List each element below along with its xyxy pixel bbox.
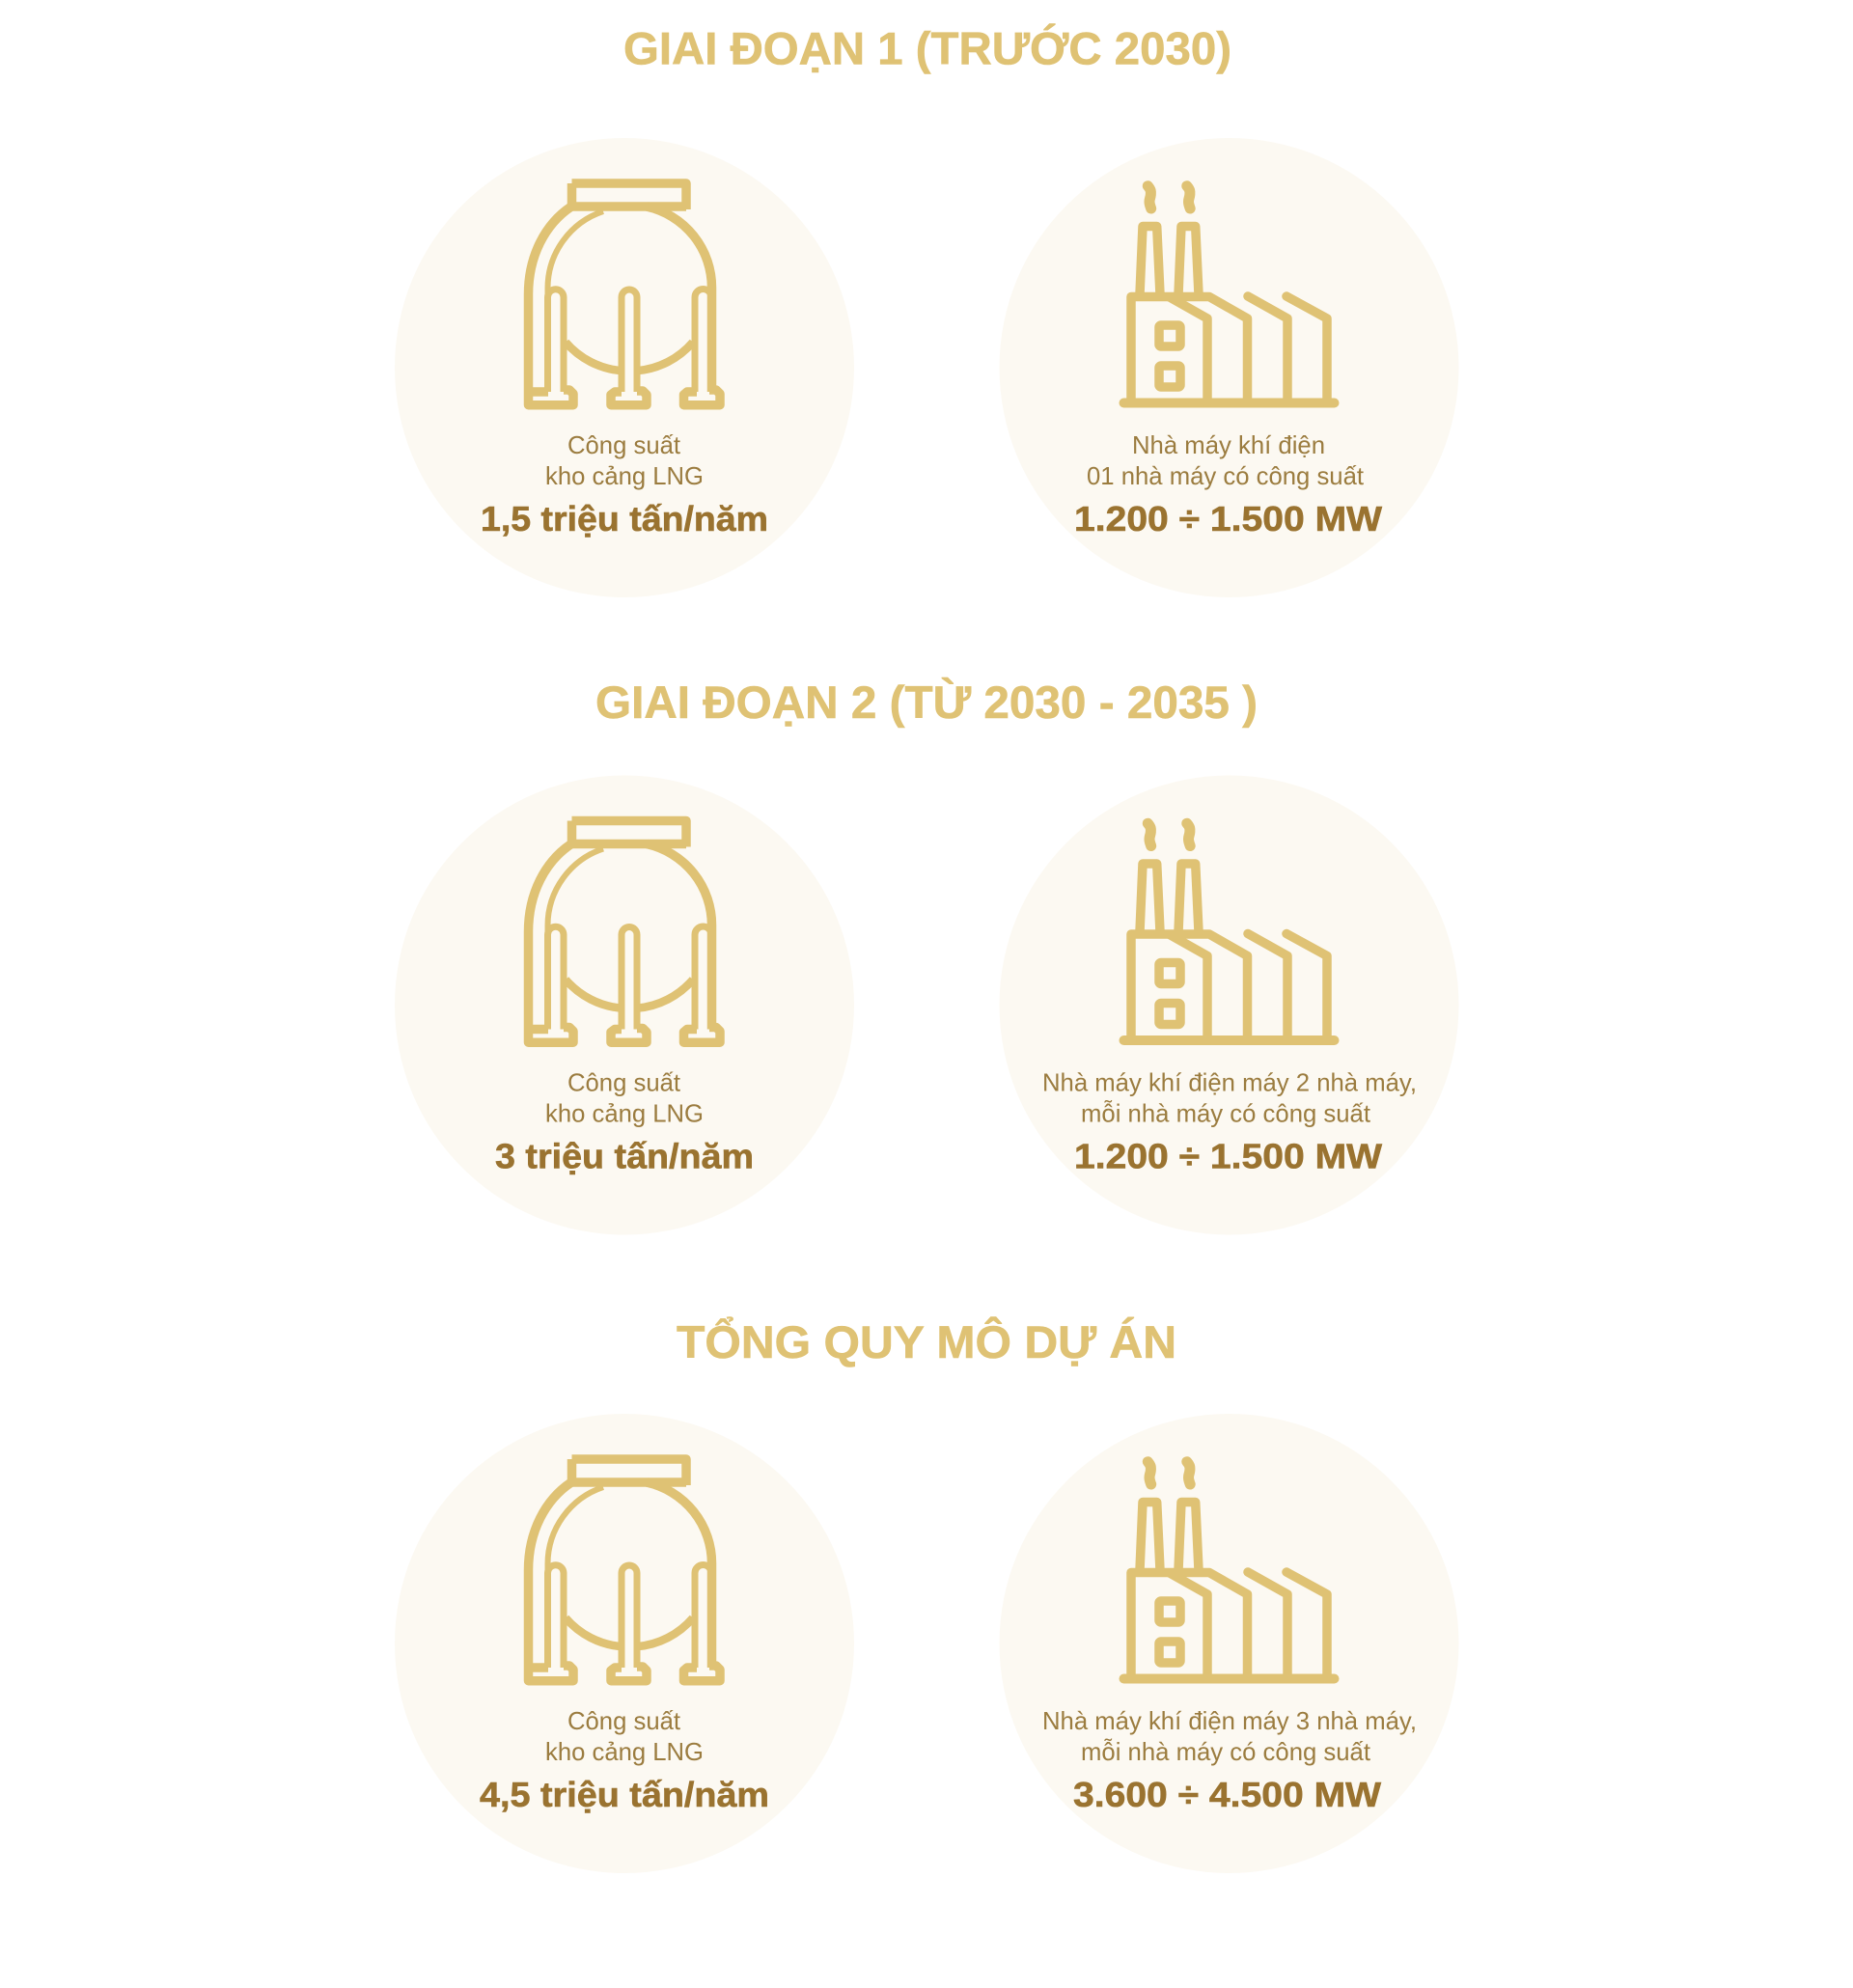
text: nhà máy khí điện máy 2 nhà máy: Nhà máy khí điện máy 2 nhà máy, — [1042, 1067, 1417, 1096]
text: công suất: Công suất — [567, 1706, 681, 1735]
value: 3.600 ÷ 4.500 MW: 3.600 ÷ 4.500 MW — [1073, 1775, 1381, 1814]
panel: tổng nhà máy khí điện — [1000, 1414, 1459, 1873]
icon: LNG tank — [529, 183, 720, 405]
icon: factory — [1123, 823, 1334, 1040]
text: kho cảng LNG: kho cảng LNG — [545, 461, 704, 490]
text: kho cảng LNG: kho cảng LNG — [545, 1737, 704, 1766]
value: 1.200 ÷ 1.500 MW: 1.200 ÷ 1.500 MW — [1074, 499, 1382, 538]
value: 3 triệu tấn/năm: 3 triệu tấn/năm — [495, 1137, 754, 1175]
panel: giai đoạn 1 nhà máy khí điện — [1000, 138, 1459, 597]
text: mỗi nhà máy có công suất: mỗi nhà máy có công suất — [1081, 1098, 1371, 1127]
value: 4,5 triệu tấn/năm: 4,5 triệu tấn/năm — [480, 1775, 769, 1814]
title: giai đoạn 1: GIAI ĐOẠN 1 (TRƯỚC 2030) — [623, 23, 1231, 73]
icon: LNG tank — [529, 1459, 720, 1681]
text: mỗi nhà máy có công suất: mỗi nhà máy có công suất — [1081, 1737, 1371, 1766]
title: tổng quy mô dự án: TỔNG QUY MÔ DỰ ÁN — [677, 1316, 1176, 1367]
text: nhà máy khí điện máy 3 nhà máy: Nhà máy khí điện máy 3 nhà máy, — [1042, 1706, 1417, 1735]
panel: giai đoạn 2 nhà máy khí điện — [1000, 776, 1459, 1235]
panel: giai đoạn 2 kho cảng LNG — [395, 776, 854, 1235]
panel: tổng kho cảng LNG — [395, 1414, 854, 1873]
text: 01 nhà máy có công suất: 01 nhà máy có công suất — [1087, 461, 1365, 490]
text: công suất: Công suất — [567, 1067, 681, 1096]
title: giai đoạn 2: GIAI ĐOẠN 2 (TỪ 2030 - 2035 ) — [595, 676, 1258, 728]
text: kho cảng LNG: kho cảng LNG — [545, 1098, 704, 1127]
icon: factory — [1123, 1462, 1334, 1679]
icon: factory — [1123, 186, 1334, 403]
icon: LNG tank — [529, 820, 720, 1042]
panel: giai đoạn 1 kho cảng LNG — [395, 138, 854, 597]
value: 1,5 triệu tấn/năm: 1,5 triệu tấn/năm — [481, 499, 768, 538]
text: công suất: Công suất — [567, 430, 681, 459]
text: nhà máy khí điện: Nhà máy khí điện — [1132, 430, 1325, 459]
value: 1.200 ÷ 1.500 MW: 1.200 ÷ 1.500 MW — [1074, 1137, 1382, 1175]
